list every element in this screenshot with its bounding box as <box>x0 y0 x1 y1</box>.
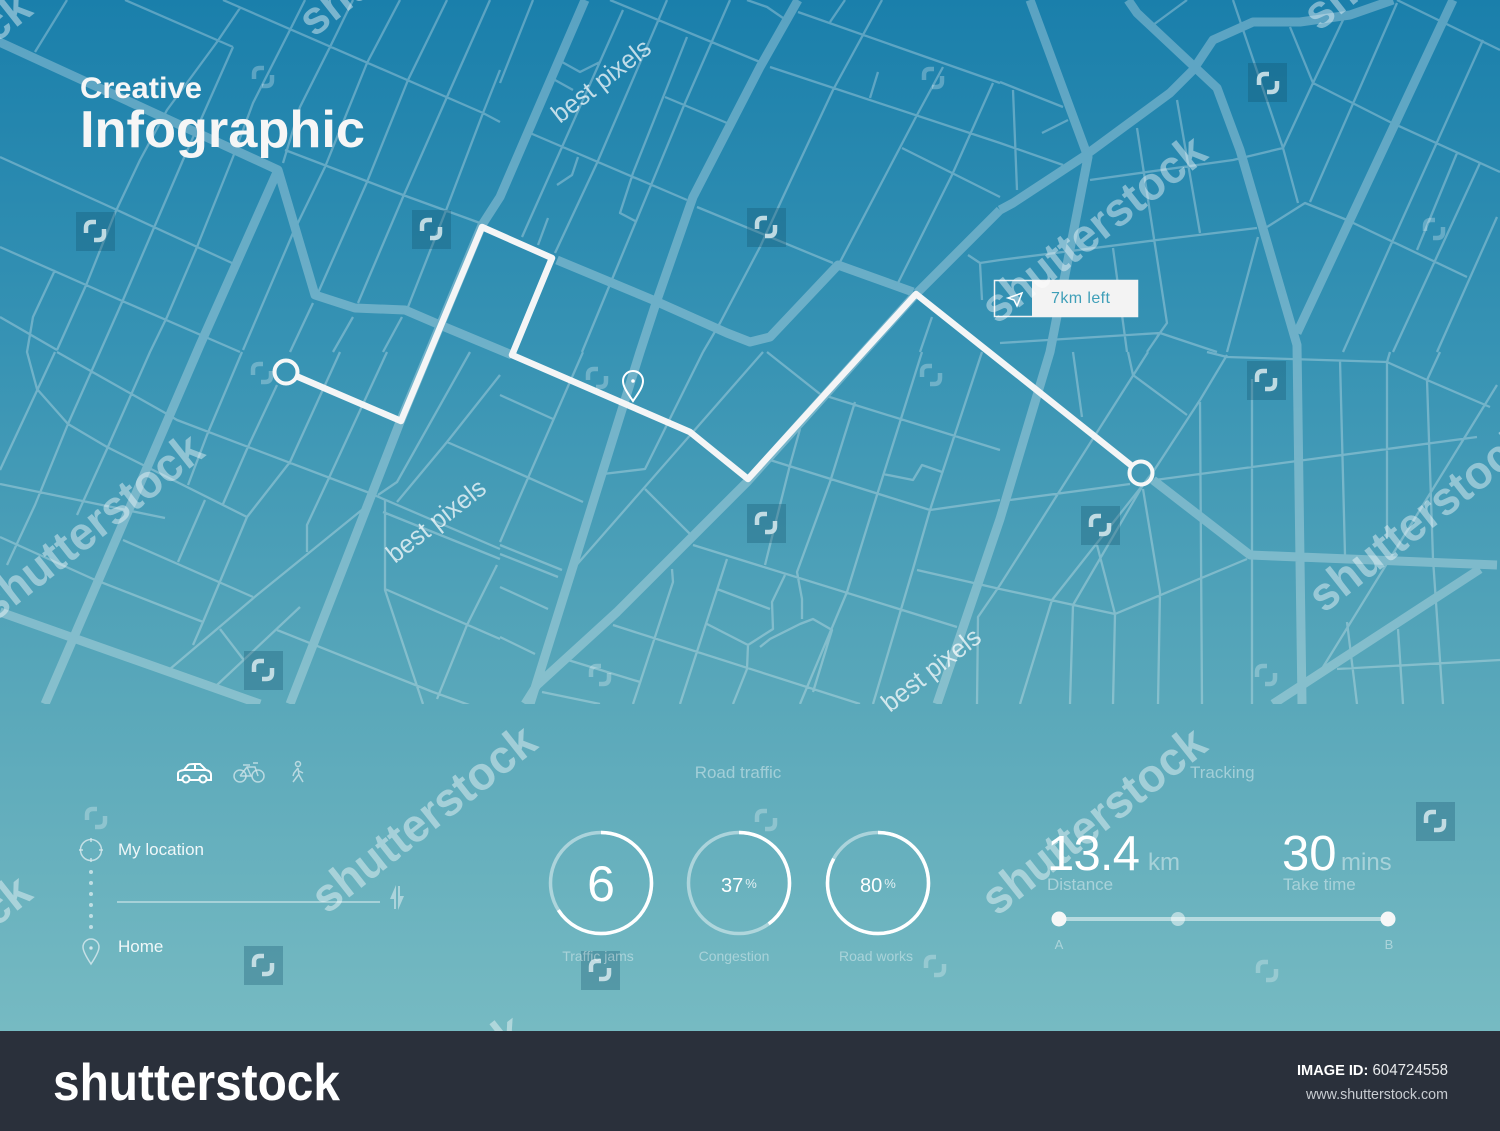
footer bar <box>0 1031 1500 1131</box>
icon: walking person <box>293 762 303 782</box>
panel: tracking <box>1047 763 1396 952</box>
dotted connector <box>89 870 93 929</box>
minor streets <box>0 0 1500 716</box>
route end marker <box>1130 462 1152 484</box>
watermark text: shutterstock <box>300 713 547 923</box>
callout: 7km left: 7km left <box>1051 290 1111 307</box>
progress slider <box>1052 912 1396 952</box>
time stat <box>1282 827 1392 894</box>
panel: road traffic <box>550 763 928 964</box>
distance stat: km <box>1148 849 1180 876</box>
route start marker <box>274 360 298 384</box>
best pixels watermarks: best pixels <box>875 621 987 718</box>
gauge: congestion <box>688 832 790 964</box>
tracking heading: Tracking <box>1190 763 1255 782</box>
callout: 7km left <box>994 280 1138 316</box>
time stat: mins <box>1341 849 1392 876</box>
divider with swap <box>117 901 380 903</box>
progress slider: A <box>1055 937 1064 952</box>
watermark text: shutterstock <box>970 123 1217 333</box>
road traffic heading: Road traffic <box>695 763 782 782</box>
gauge: congestion: 37 <box>721 875 743 897</box>
progress slider: B <box>1385 937 1393 952</box>
title <box>80 72 365 159</box>
watermark icons <box>76 63 1455 990</box>
panel: city map <box>0 0 1500 716</box>
icon: location pin on route <box>623 371 643 401</box>
gauge: traffic jams: Traffic jams <box>562 948 634 964</box>
home label: Home <box>118 937 163 956</box>
gauge: traffic jams: 6 <box>587 856 615 912</box>
distance stat: Distance <box>1047 875 1113 894</box>
website: www.shutterstock.com <box>1305 1087 1448 1103</box>
icon: car <box>178 764 211 782</box>
icon: crosshair <box>79 838 103 862</box>
icon: home pin <box>83 939 99 964</box>
distance stat: 13.4 <box>1047 827 1140 881</box>
gauge: congestion: % <box>745 876 757 891</box>
image id: IMAGE ID: 604724558 <box>1297 1062 1448 1079</box>
major roads <box>0 0 1497 704</box>
title: Infographic <box>80 101 365 159</box>
footer logo: shutterstock <box>53 1054 340 1112</box>
best pixels watermarks: best pixels <box>380 472 492 569</box>
gauge: road works: 80 <box>860 875 882 897</box>
time stat: 30 <box>1282 827 1337 881</box>
best pixels watermarks <box>380 32 987 718</box>
gauge: road works: Road works <box>839 948 913 964</box>
icon: navigation arrow <box>1008 293 1022 306</box>
title: Creative <box>80 72 202 105</box>
best pixels watermarks: best pixels <box>545 32 657 129</box>
distance stat <box>1047 827 1180 894</box>
gauge: traffic jams <box>550 832 652 964</box>
icon: swap arrows <box>390 885 404 910</box>
watermark text: k <box>481 1003 535 1061</box>
gauge: congestion: Congestion <box>699 948 769 964</box>
watermark text: shutterstock <box>970 715 1217 925</box>
route line <box>274 227 1152 484</box>
gauge: road works <box>828 832 928 964</box>
gauge: road works: % <box>884 876 896 891</box>
time stat: Take time <box>1283 875 1356 894</box>
panel: route planner <box>79 762 404 964</box>
my location label: My location <box>118 840 204 859</box>
icon: bicycle <box>234 763 264 782</box>
